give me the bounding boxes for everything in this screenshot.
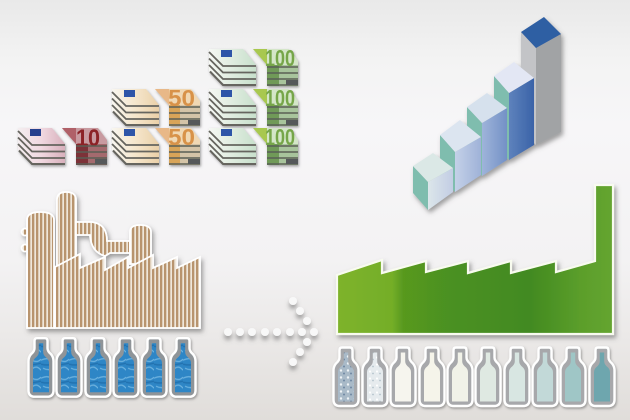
green factory xyxy=(337,185,613,334)
50 euro stack, upper xyxy=(112,85,200,126)
source bottles row xyxy=(28,338,196,397)
bottle 1 xyxy=(334,348,358,406)
100 euro stack, middle: 100 xyxy=(265,85,295,111)
isometric rising bar chart xyxy=(413,17,561,210)
short tower xyxy=(130,225,151,264)
100 euro stack, bottom xyxy=(209,124,298,165)
bottle 1 xyxy=(28,338,54,397)
bottle 3 xyxy=(390,348,416,406)
dotted arrow xyxy=(224,297,318,366)
left tower xyxy=(27,212,54,328)
tall chimney xyxy=(57,192,76,268)
bar 1 xyxy=(413,153,453,210)
pipe xyxy=(76,222,130,256)
bar 2 xyxy=(440,120,481,192)
bar 4 xyxy=(494,62,534,160)
bottle 4 xyxy=(420,348,444,406)
10 euro stack xyxy=(18,125,107,165)
10 euro stack: 10 xyxy=(76,125,100,152)
100 euro stack, top: 100 xyxy=(265,45,295,71)
50 euro stack, lower: 50 xyxy=(168,124,195,150)
result bottles row xyxy=(334,348,614,406)
bottle 6 xyxy=(476,348,500,406)
bottle 10 xyxy=(590,348,614,406)
100 euro stack, top xyxy=(209,45,298,86)
bottle 3 xyxy=(86,338,110,397)
sawtooth hall xyxy=(55,254,200,328)
bar 3 xyxy=(467,93,507,176)
bottle 7 xyxy=(504,348,530,406)
striped factory xyxy=(22,192,200,328)
bottle 5 xyxy=(142,338,166,397)
bottle 4 xyxy=(114,338,138,397)
bottle 2 xyxy=(56,338,82,397)
left ear valves xyxy=(22,228,28,252)
bottle 2 xyxy=(362,348,388,406)
bottle 9 xyxy=(560,348,586,406)
bar 5 xyxy=(521,17,561,145)
100 euro stack, bottom: 100 xyxy=(265,124,295,150)
50 euro stack, upper: 50 xyxy=(168,85,195,111)
bottle 8 xyxy=(532,348,558,406)
bottle 5 xyxy=(448,348,472,406)
bottle 6 xyxy=(170,338,196,397)
100 euro stack, middle xyxy=(209,85,298,126)
50 euro stack, lower xyxy=(112,124,200,165)
euro banknote stacks xyxy=(18,45,298,165)
